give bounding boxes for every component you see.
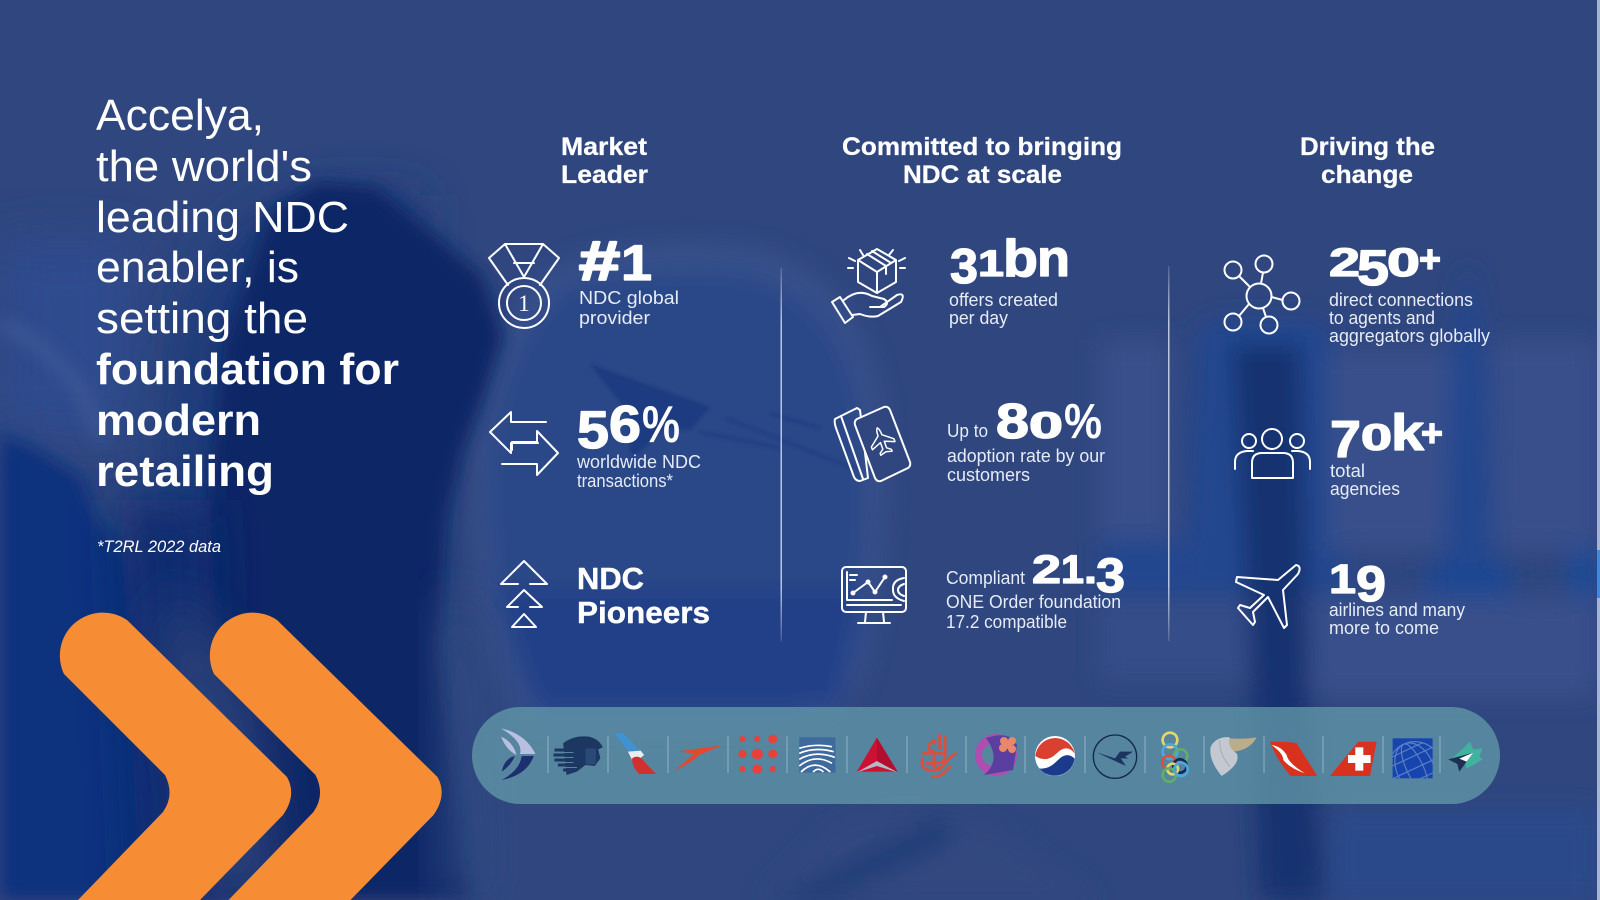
stat: compliant 21.3 ONE Order: Compliant [946, 567, 1025, 588]
stat: 31bn offers created per day: 1 [978, 243, 1004, 284]
logo: Hawaiian [975, 734, 1017, 776]
heading: committed to bringing NDC at scale: NDC at scale [903, 161, 1062, 189]
stat: compliant 21.3 ONE Order: 3 [1096, 550, 1125, 603]
title: Accelya statement [96, 91, 399, 496]
icon: hand holding box [832, 249, 905, 323]
stat: #1 NDC global provider: 1 [621, 235, 652, 291]
stat: 56% worldwide NDC transactions: transactions* [577, 470, 673, 491]
stat: up to 80% adoption rate: adoption rate by our [947, 445, 1105, 466]
stat: 250+ direct connections: aggregators globally [1329, 325, 1491, 346]
stat: 56% worldwide NDC transactions: 6 [609, 396, 641, 454]
stat: 31bn offers created per day: 3 [950, 240, 978, 294]
stat: 19 airlines [1329, 556, 1466, 638]
stat: 31bn offers created per day: b [1003, 230, 1038, 288]
stat: 31bn offers created per day: per day [949, 307, 1009, 328]
stat: #1 NDC global provider: provider [579, 307, 650, 328]
stat: NDC Pioneers [577, 561, 710, 630]
title: Accelya statement: leading NDC [96, 193, 349, 242]
stat: up to 80% adoption rate: % [1064, 395, 1102, 449]
heading: committed to bringing NDC at scale [842, 133, 1122, 189]
logo: United globe [1392, 738, 1433, 778]
stat: up to 80% adoption rate: Up to [947, 420, 988, 441]
stat: compliant 21.3 ONE Order [946, 548, 1125, 632]
heading: driving the change: Driving the [1300, 133, 1435, 161]
stat: 70k+ total agencies: 7 [1330, 411, 1361, 469]
icon: airplane [1236, 565, 1300, 628]
stat: 19 airlines: 9 [1356, 556, 1386, 612]
title: Accelya statement: setting the [96, 294, 308, 343]
stat: 19 airlines: airlines and many [1329, 599, 1466, 620]
stat: 56% worldwide NDC transactions: worldwide NDC [576, 451, 701, 472]
icon: stacked upward chevrons [501, 561, 547, 627]
stat: 250+ direct connections: 5 [1357, 240, 1389, 296]
footnote: *T2RL 2022 data [97, 537, 221, 556]
stat: 250+ direct connections: to agents and [1329, 307, 1435, 328]
stat: 250+ direct connections: 2 [1329, 241, 1360, 285]
title: Accelya statement: retailing [96, 447, 274, 496]
heading: market leader: Market [561, 133, 648, 161]
logo: silver and gold wing [1210, 737, 1257, 776]
logo: Copa square [799, 737, 835, 773]
panel: driving the change [1224, 133, 1491, 638]
logo: Emirates calligraphy [922, 735, 955, 777]
title: Accelya statement: the world's [96, 142, 312, 191]
title: Accelya statement: Accelya, [96, 91, 264, 140]
stat: compliant 21.3 ONE Order: 1 [1061, 548, 1084, 592]
logos: first group [501, 728, 955, 780]
panel: committed to bringing NDC at scale [832, 133, 1125, 632]
logo: Delta triangle [857, 738, 898, 772]
stat: #1 NDC global provider: NDC global [579, 287, 679, 308]
stat: 19 airlines: more to come [1329, 617, 1439, 638]
stat: 56% worldwide NDC transactions: % [642, 396, 680, 454]
icon: network nodes [1224, 256, 1300, 334]
logo: Korean Air [1035, 736, 1075, 776]
stat: compliant 21.3 ONE Order: ONE Order foundation [946, 591, 1121, 612]
stat: 250+ direct connections: + [1419, 239, 1441, 281]
stat: 31bn offers created per day [949, 230, 1070, 328]
icon: monitor with chart and gear [842, 567, 906, 623]
icon: medal: 1 [518, 291, 530, 316]
stat: 31bn offers created per day: offers created [949, 289, 1058, 310]
logo: red swoosh [674, 746, 722, 771]
stat: 250+ direct connections: 0 [1387, 241, 1420, 285]
icon: medal [489, 244, 559, 328]
logo: Aegean feathers [501, 728, 536, 780]
icon: group of people [1235, 429, 1310, 478]
logo: Lufthansa crane [1093, 735, 1137, 778]
stat: 56% worldwide NDC transactions: 5 [577, 401, 609, 460]
stat: up to 80% adoption rate: customers [947, 464, 1030, 485]
stat: 70k+ total agencies: 0 [1361, 417, 1392, 458]
logo: Swiss tail [1330, 742, 1377, 776]
orange double chevron arrow [60, 613, 442, 900]
stat: 70k+ total agencies: total [1330, 460, 1365, 481]
stat: #1 NDC global provider: # [579, 229, 620, 292]
stat: 250+ direct connections [1329, 239, 1491, 346]
stat: 56% worldwide NDC transactions [576, 396, 701, 491]
stat: up to 80% adoption rate: 0 [1029, 405, 1063, 446]
logo: WestJet leaf [1448, 742, 1483, 772]
panel: airline logos pill [472, 707, 1500, 804]
logos: second group [1035, 731, 1482, 783]
title: Accelya statement: enabler, is [96, 243, 299, 292]
stat: 250+ direct connections: direct connections [1329, 289, 1473, 310]
logo: American tail [614, 733, 656, 774]
icon: exchange arrows [490, 412, 558, 475]
stat: 70k+ total agencies: agencies [1330, 478, 1400, 499]
stat: up to 80% adoption rate: 8 [996, 395, 1029, 449]
stat: 70k+ total agencies: k [1391, 404, 1425, 461]
logo: Qantas tail [1270, 742, 1317, 776]
heading: market leader: Leader [561, 161, 648, 189]
column dividers [780, 266, 1170, 641]
icon: tickets with plane [835, 407, 910, 481]
stat: NDC Pioneers: Pioneers [577, 595, 710, 630]
stat: NDC Pioneers: NDC [577, 561, 644, 596]
stat: 70k+ total agencies: + [1421, 413, 1443, 455]
heading: committed to bringing NDC at scale: Committed to bringing [842, 133, 1122, 161]
logo separators [548, 736, 1440, 773]
heading: market leader [561, 133, 648, 189]
heading: driving the change: change [1321, 161, 1413, 189]
panel: market leader [489, 133, 710, 630]
stat: 19 airlines: 1 [1329, 556, 1356, 602]
title: Accelya statement: foundation for [96, 345, 399, 394]
heading: driving the change [1300, 133, 1435, 189]
title: Accelya statement: modern [96, 396, 261, 445]
logo: red dots [738, 735, 777, 774]
stat: 31bn offers created per day: n [1037, 230, 1070, 288]
logo: Aeromexico eagle [553, 736, 603, 775]
stat: up to 80% adoption rate [947, 395, 1105, 485]
stat: compliant 21.3 ONE Order: . [1084, 548, 1097, 592]
stat: compliant 21.3 ONE Order: 2 [1032, 548, 1061, 592]
logo: alliance rings [1162, 733, 1188, 782]
stat: #1 NDC global provider [579, 229, 679, 328]
stat: compliant 21.3 ONE Order: 17.2 compatible [946, 611, 1067, 632]
stat: 70k+ total agencies [1330, 404, 1443, 499]
